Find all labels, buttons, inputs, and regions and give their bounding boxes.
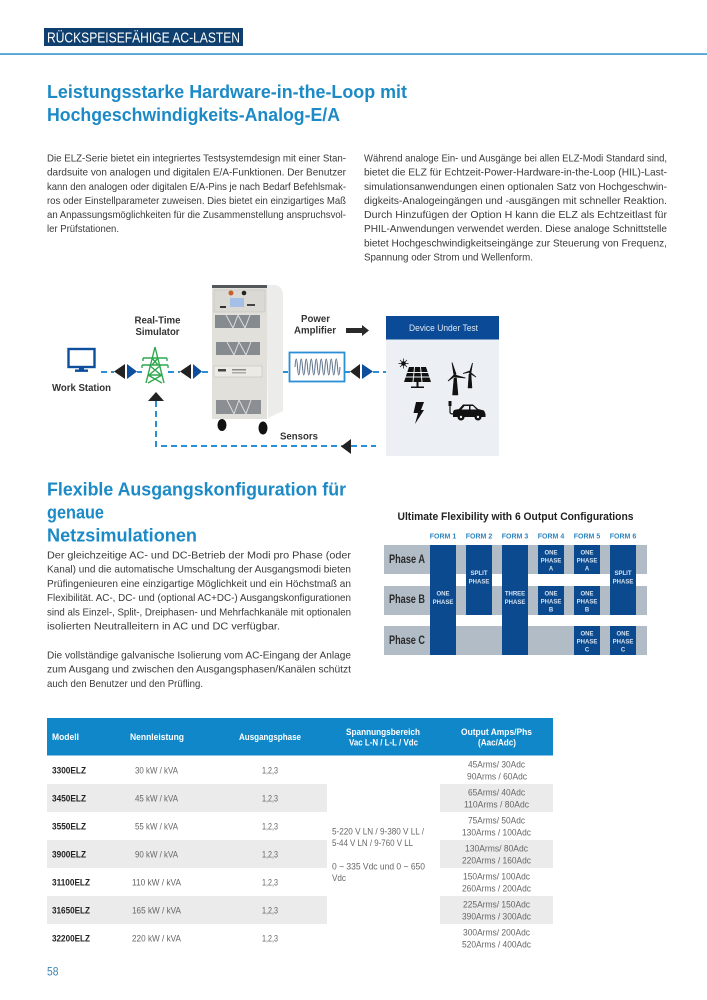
form block labels: ONE [580, 550, 594, 556]
label: Power Amplifier [294, 314, 336, 336]
text block: flexible output description: Kanal) und die automatische Umschaltung der Ausgangsmodi bieten [47, 565, 351, 576]
model column: 3450ELZ [52, 794, 86, 804]
voltage range cell: Vdc [332, 873, 346, 884]
chart: output configurations [384, 511, 647, 655]
chart title: Ultimate Flexibility with 6 Output Configurations [398, 511, 634, 523]
section tag: Rückspeisefähige AC-Lasten: RÜCKSPEISEFÄHIGE AC-LASTEN [47, 28, 240, 46]
table header: Nennleistung [130, 732, 184, 742]
text block: flexible output description: Die vollständige galvanische Isolierung vom AC-Eingang der Anlage [47, 650, 351, 662]
voltage range cell: 5-220 V LN / 9-380 V LL / [332, 826, 424, 838]
form block labels: A [549, 566, 554, 572]
panel: device under test: Device Under Test [409, 323, 478, 334]
output current column: 130Arms/ 80Adc [465, 844, 528, 854]
form block labels: THREE [505, 592, 525, 598]
diagram: hardware-in-the-loop setup [52, 285, 499, 456]
model column [52, 766, 90, 944]
form block labels: PHASE [577, 558, 597, 564]
label: Real-Time Simulator: Real-Time [134, 316, 181, 326]
model column: 32200ELZ [52, 934, 90, 944]
output current column: 520Arms / 400Adc [462, 940, 531, 950]
voltage range cell: 0 ~ 335 Vdc und 0 ~ 650 [332, 862, 425, 872]
text block: left intro column: Die ELZ-Serie bietet ein integriertes Testsystemdesign mit einer Stan- [47, 154, 346, 164]
form labels [430, 534, 636, 540]
product photo: ELZ cabinet [212, 285, 283, 434]
phase labels: Phase A [389, 554, 425, 566]
form block labels: B [585, 608, 590, 614]
phase column: 1,2,3 [262, 934, 278, 944]
icon: solar panel [398, 358, 431, 388]
form block labels: ONE [580, 632, 594, 638]
text block: flexible output description: Der gleichzeitige AC- und DC-Betrieb der Modi pro Phase (oder [47, 550, 352, 562]
form labels: FORM 5 [574, 534, 600, 540]
output current column: 300Arms/ 200Adc [463, 928, 530, 938]
output current column: 90Arms / 60Adc [467, 772, 527, 782]
heading: Flexible Ausgangskonfiguration [47, 480, 346, 546]
table header: Ausgangsphase [239, 732, 301, 742]
model column: 3900ELZ [52, 850, 86, 860]
text block: flexible output description: Flexibilität. AC-, DC- und (optional AC+DC-) Ausgangskonfigurationen [47, 593, 351, 604]
output current column: 45Arms/ 30Adc [468, 760, 525, 770]
power column: 220 kW / kVA [132, 934, 182, 944]
form block labels [433, 550, 633, 654]
form block labels: C [621, 648, 626, 654]
arrows: workstation to simulator [114, 364, 137, 379]
text block: right intro column: PHIL-Anwendungen verwendet werden. Diese analoge Schnittstelle [364, 224, 667, 235]
panel: device under test [386, 316, 499, 456]
text block: right intro column: Spannung oder Strom und Wellenform. [364, 252, 533, 264]
arrow: sensors return [341, 439, 351, 454]
output current column: 260Arms / 200Adc [462, 884, 531, 894]
phase labels [389, 554, 425, 647]
power column [132, 766, 182, 944]
label: Sensors: Sensors [280, 432, 318, 442]
page number: 58 [47, 964, 59, 978]
text block: left intro column: dardsuite von analogen und digitalen E/A-Funktionen. Der Benutzer [47, 168, 347, 179]
output current column: 75Arms/ 50Adc [468, 816, 525, 826]
form labels: FORM 2 [466, 534, 492, 540]
text block: left intro column: ler Prüfstationen. [47, 224, 119, 235]
output current column: 225Arms/ 150Adc [463, 900, 530, 910]
form block labels: PHASE [577, 640, 597, 646]
text block: right intro column: digkeits-Analogeingängen und -ausgängen mit schneller Reaktion. [364, 196, 667, 207]
arrows: simulator to cabinet [180, 364, 202, 379]
text block: flexible output description: sind als Einzel-, Split-, Dreiphasen- und Mehrfachkanäle mit optionalen [47, 607, 351, 618]
voltage range cell [332, 826, 425, 884]
heading: Flexible Ausgangskonfiguration: genaue [47, 502, 104, 522]
model column: 31650ELZ [52, 906, 90, 916]
text block: left intro column: kann den analogen oder digitalen E/A-Pins je nach Bedarf Befehlsmak- [47, 182, 346, 193]
power column: 110 kW / kVA [132, 878, 182, 888]
text block: right intro column: bietet Hochgeschwindigkeitseingänge zur Steuerung von Frequenz, [364, 238, 667, 249]
heading: Flexible Ausgangskonfiguration: Flexible Ausgangskonfiguration für [47, 480, 346, 500]
output current column: 390Arms / 300Adc [462, 912, 531, 922]
arrow: sensors up to simulator [148, 392, 164, 401]
output current column [462, 760, 531, 950]
power column: 90 kW / kVA [135, 850, 179, 860]
text block: flexible output description: zum Ausgang und zwischen den Ausgangsphasen/Kanälen schützt [47, 665, 351, 676]
table header: Vac L-N / L-L / Vdc [349, 738, 418, 748]
label: Real-Time Simulator [134, 316, 181, 338]
form labels: FORM 1 [430, 534, 456, 540]
heading: Hardware-in-the-Loop: Hochgeschwindigkeits-Analog-E/A [47, 105, 340, 125]
form block labels: A [585, 566, 590, 572]
arrow: amplifier to device [346, 325, 369, 336]
phase bars [384, 545, 647, 655]
power column: 30 kW / kVA [135, 766, 179, 776]
form block labels: PHASE [613, 640, 633, 646]
form block labels: ONE [580, 592, 594, 598]
text block: left intro column: an Anpassungsmöglichkeiten für die Zusammenstellung anspruchsvol- [47, 210, 346, 221]
text block: right intro column: simulationsanwendungen einen optionalen Satz von Hochgeschwin- [364, 182, 667, 193]
text block: flexible output description: Prüfingenieuren eine einzigartige Möglichkeit und ein Höchstmaß an [47, 579, 351, 590]
icon: electric car [448, 401, 486, 420]
table header [47, 718, 553, 756]
icon: lightning bolt [414, 402, 424, 424]
phase column [262, 766, 278, 944]
form block labels: PHASE [541, 558, 561, 564]
icon: wind turbines [448, 362, 476, 395]
label: Work Station: Work Station [52, 383, 111, 394]
voltage range cell: 5-44 V LN / 9-760 V LL [332, 838, 413, 849]
power column: 45 kW / kVA [135, 794, 179, 804]
phase column: 1,2,3 [262, 906, 278, 916]
table header: Modell [52, 732, 79, 742]
arrows: amplifier to device [350, 364, 373, 379]
label: Real-Time Simulator: Simulator [136, 327, 180, 338]
label: Power Amplifier: Amplifier [294, 326, 336, 336]
table header: Output Amps/Phs [461, 727, 532, 737]
form block labels: PHASE [433, 600, 453, 606]
form block labels: B [549, 608, 554, 614]
form block labels: SPLIT [614, 571, 632, 577]
output current column: 130Arms / 100Adc [462, 828, 531, 838]
text block: left intro column [47, 154, 347, 235]
form labels: FORM 3 [502, 534, 528, 540]
power column: 165 kW / kVA [132, 906, 182, 916]
heading: Flexible Ausgangskonfiguration: Netzsimulationen [47, 526, 197, 546]
phase column: 1,2,3 [262, 766, 278, 776]
output current column: 65Arms/ 40Adc [468, 788, 525, 798]
form blocks [430, 545, 636, 655]
text block: flexible output description: isolierten Neutralleitern in AC und DC verfügbar. [47, 622, 280, 632]
phase labels: Phase B [389, 594, 425, 606]
text block: right intro column: Während analoge Ein- und Ausgänge bei allen ELZ-Modi Standard sind, [364, 154, 667, 164]
phase column: 1,2,3 [262, 850, 278, 860]
text block: right intro column: bietet die ELZ für Echtzeit-Power-Hardware-in-the-Loop (HIL)-Last- [364, 168, 667, 179]
model column: 31100ELZ [52, 878, 90, 888]
heading: Hardware-in-the-Loop [47, 82, 407, 125]
heading: Hardware-in-the-Loop: Leistungsstarke Hardware-in-the-Loop mit [47, 82, 407, 102]
text block: right intro column: Durch Hinzufügen der Option H kann die ELZ als Echtzeitlast für [364, 210, 668, 221]
output current column: 150Arms/ 100Adc [463, 872, 530, 882]
icon: waveform box [290, 352, 344, 382]
connection lines [101, 372, 386, 446]
power column: 55 kW / kVA [135, 822, 179, 832]
phase column: 1,2,3 [262, 822, 278, 832]
form block labels: C [585, 648, 590, 654]
form block labels: ONE [436, 592, 450, 598]
form block labels: PHASE [541, 600, 561, 606]
label: Power Amplifier: Power [301, 314, 330, 325]
table: model specifications [47, 718, 553, 950]
row shading [47, 784, 553, 924]
phase labels: Phase C [389, 635, 425, 647]
table header: Spannungsbereich [346, 727, 420, 737]
form labels: FORM 4 [538, 534, 564, 540]
form block labels: ONE [616, 632, 630, 638]
form block labels: ONE [544, 550, 558, 556]
model column: 3550ELZ [52, 822, 86, 832]
form block labels: PHASE [613, 579, 633, 585]
text block: right intro column [364, 154, 668, 264]
icon: grid tower [142, 347, 168, 383]
output current column: 110Arms / 80Adc [464, 800, 529, 810]
form block labels: PHASE [469, 579, 489, 585]
form block labels: ONE [544, 592, 558, 598]
icon: work station monitor [68, 349, 94, 372]
form block labels: PHASE [577, 600, 597, 606]
text block: flexible output description: auch den Benutzer und den Prüfling. [47, 679, 203, 690]
form block labels: PHASE [505, 600, 525, 606]
table header: (Aac/Adc) [478, 738, 516, 748]
text block: flexible output description [47, 550, 352, 690]
form block labels: SPLIT [470, 571, 488, 577]
output current column: 220Arms / 160Adc [462, 856, 531, 866]
phase column: 1,2,3 [262, 878, 278, 888]
form labels: FORM 6 [610, 534, 636, 540]
model column: 3300ELZ [52, 766, 86, 776]
text block: left intro column: ros oder Einstellparameter zuweisen. Dies bietet ein einzigartiges Maß [47, 196, 346, 207]
phase column: 1,2,3 [262, 794, 278, 804]
